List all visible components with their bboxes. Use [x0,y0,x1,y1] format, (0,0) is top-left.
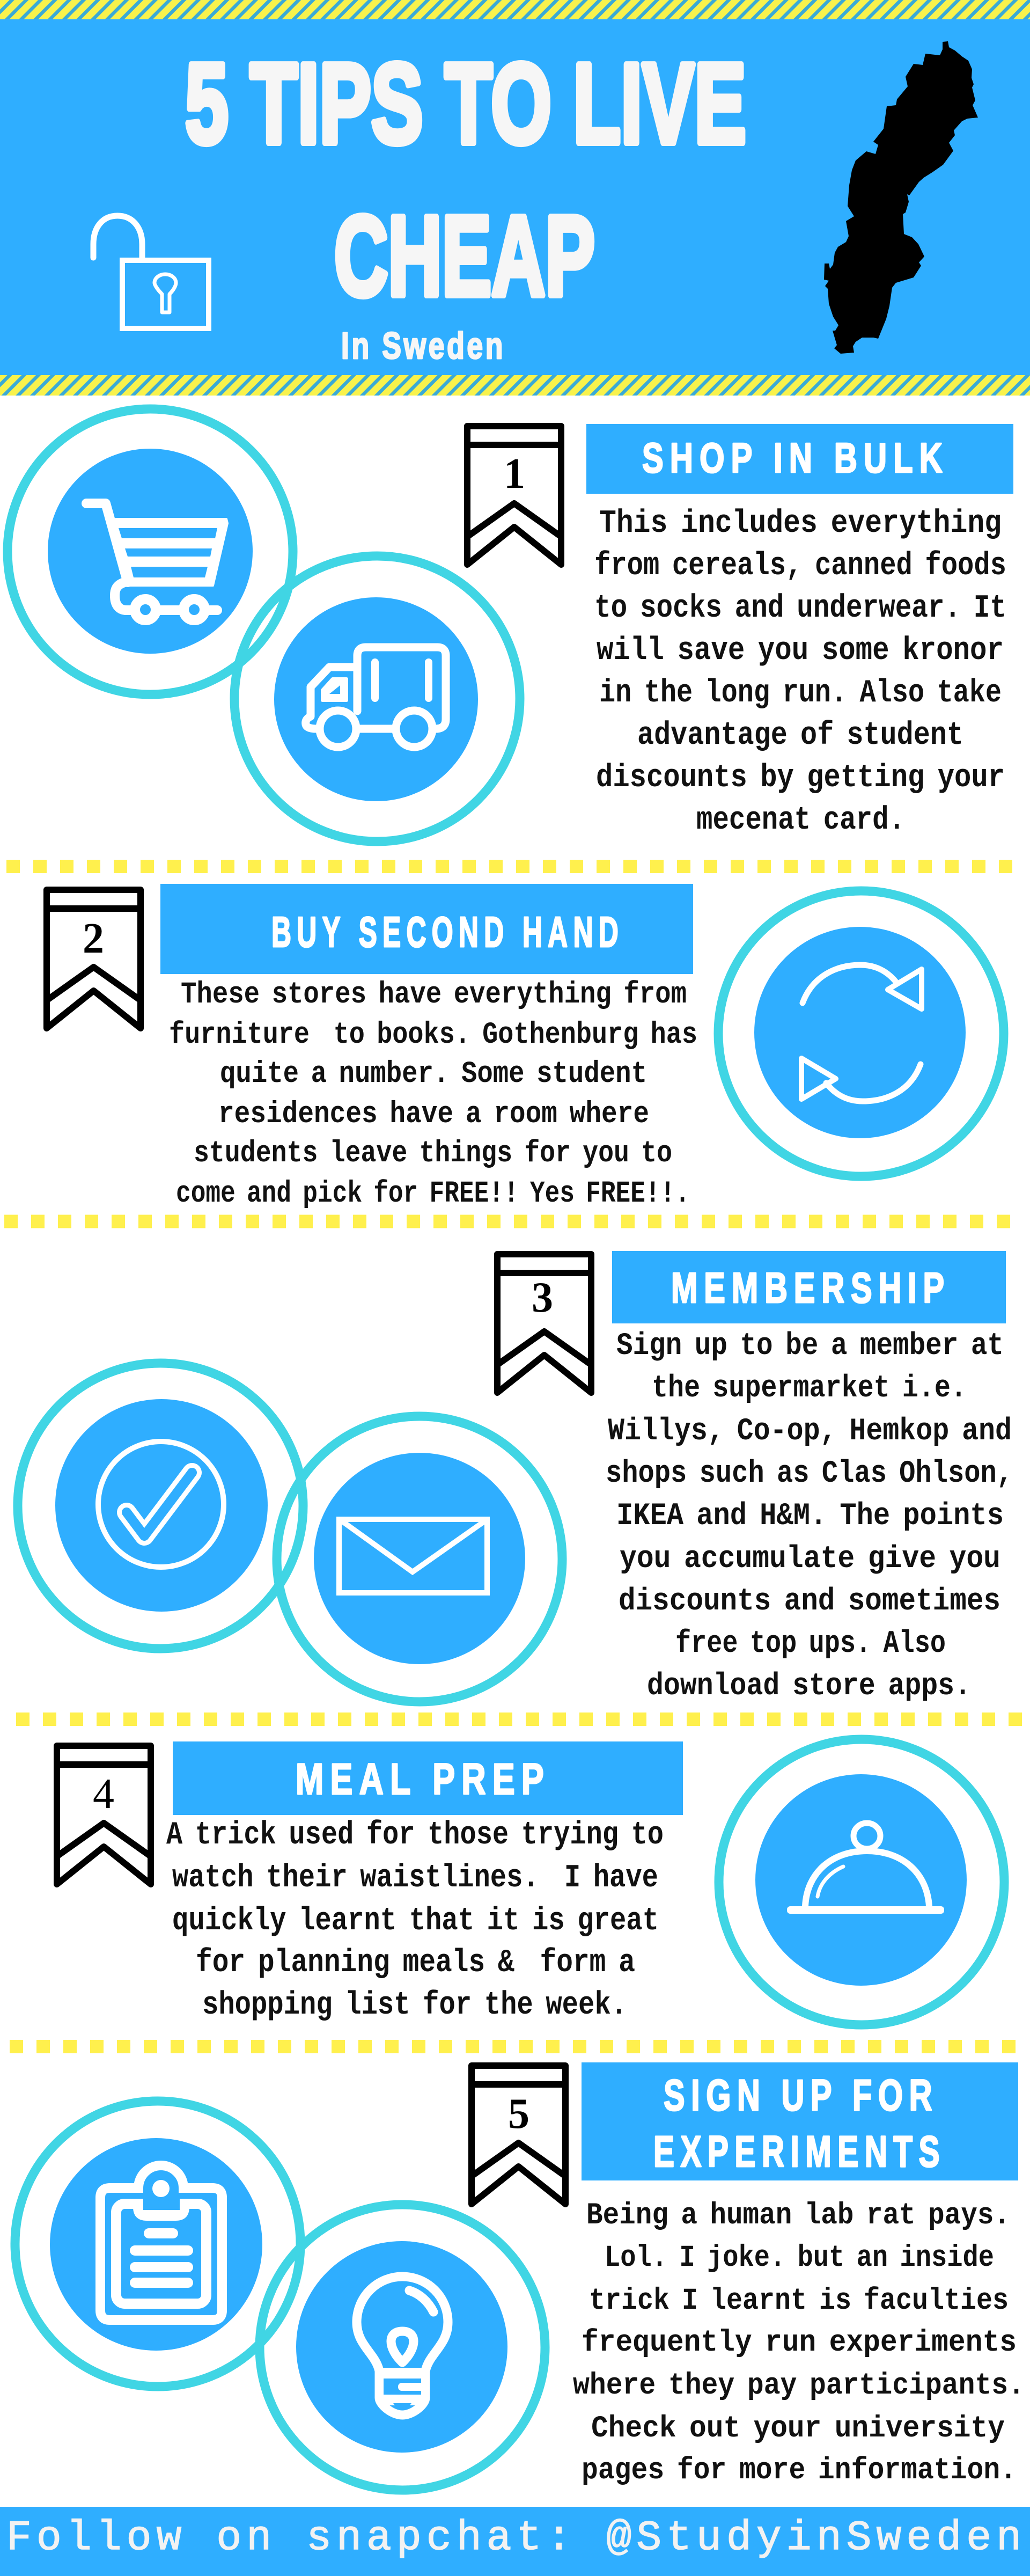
text block: furniture to books. Gothenburg has [169,1018,697,1052]
icon: open padlock [93,216,209,328]
panel: tip 3 membership [18,1251,1013,1704]
icon: ribbon number 4: 4 [93,1770,114,1818]
heading bar [160,884,693,974]
heading bar: MEAL PREP [296,1755,550,1804]
text block: shopping list for the week. [202,1987,627,2024]
text block: students leave things for you to [194,1137,672,1171]
footer bar: Follow on snapchat: @StudyinSweden [6,2515,1021,2562]
text block: Check out your university [591,2412,1005,2446]
icon: ribbon number 5: 5 [508,2090,529,2138]
text block: the supermarket i.e. [652,1371,967,1406]
icon: ribbon number 5 [472,2066,565,2204]
panel: header banner [0,0,1030,396]
text block: quite a number. Some student [220,1057,647,1092]
icon: food cloche in circle [719,1739,1004,2025]
text block: download store apps. [647,1669,971,1704]
icon: recycle arrows in circle [718,891,1004,1176]
heading bar [586,424,1013,494]
text block [594,506,1006,839]
icon: ribbon number 1 [467,426,561,565]
heading bar [173,1741,683,1815]
icon: map of Sweden [824,41,978,354]
text block: quickly learnt that it is great [172,1903,659,1940]
text block: for planning meals & form a [196,1945,635,1981]
heading bar: BUY SECOND HAND [271,908,624,956]
text block [166,1817,664,2024]
title: CHEAP [334,192,595,319]
heading bar [582,2062,1018,2180]
icon: ribbon number 2: 2 [83,915,104,962]
icon: check mark in circle [18,1363,303,1649]
icon: ribbon number 2 [47,890,141,1028]
text block: These stores have everything from [181,978,687,1012]
icon: clipboard in circle [15,2101,300,2387]
text block: residences have a room where [218,1097,649,1132]
text block: advantage of student [637,718,963,754]
panel: tip 4 meal prep [57,1739,1004,2025]
text block: free top ups. Also [675,1627,946,1662]
panel: tip 2 buy second hand [47,884,1004,1211]
subtitle: In Sweden [341,325,505,367]
text block: come and pick for FREE!! Yes FREE!!. [176,1177,690,1211]
icon: delivery truck in circle [234,556,520,841]
icon: ribbon number 4 [57,1746,151,1884]
title [185,40,746,319]
text block: A trick used for those trying to [166,1817,664,1854]
icon: ribbon number 3: 3 [532,1274,553,1321]
icon: light bulb in circle [260,2205,545,2490]
title: 5 TIPS TO LIVE [185,40,746,167]
heading bar [612,1251,1006,1323]
panel: tip 5 sign up for experiments [15,2062,1025,2490]
text block: mecenat card. [696,802,905,839]
text block [606,1329,1013,1704]
text block: you accumulate give you [620,1542,1000,1577]
icon: ribbon number 1: 1 [504,450,525,497]
panel: tip 1 shop in bulk [8,409,1013,841]
text block [573,2199,1025,2488]
text block: discounts and sometimes [619,1584,1000,1619]
text block: watch their waistlines. I have [172,1860,658,1897]
icon: envelope in circle [277,1416,562,1702]
icon: ribbon number 3 [497,1254,591,1393]
icon: shopping cart in circle [8,409,293,694]
footer bar [0,2507,1030,2576]
text block [169,978,697,1211]
